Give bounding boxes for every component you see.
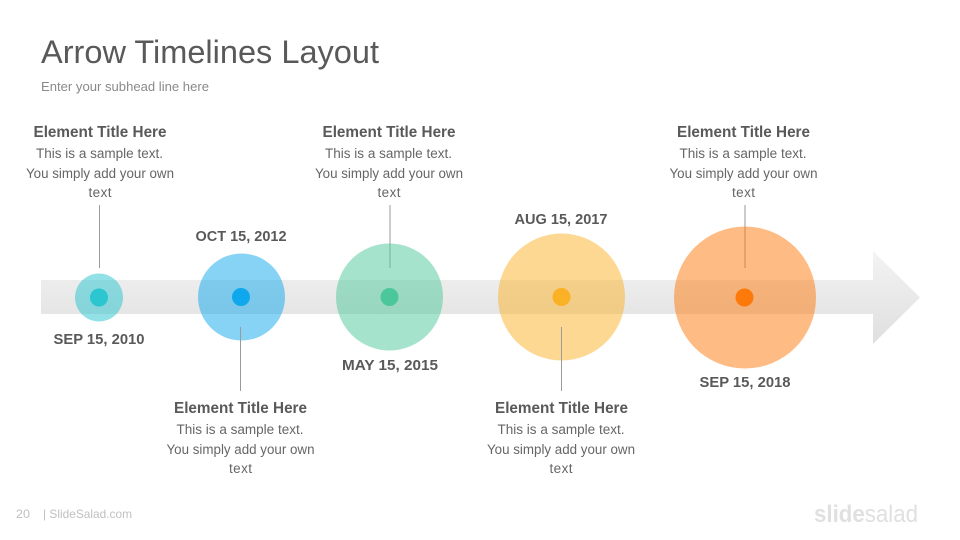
milestone 1: Sep 15, 2010 bbox=[26, 124, 174, 348]
text block: element 4: This is a sample text. bbox=[498, 422, 624, 437]
text block: element 5: Element Title Here bbox=[677, 124, 810, 141]
text block: element 5 bbox=[670, 124, 818, 200]
milestone 3: May 15, 2015 bbox=[315, 124, 463, 374]
footer: page number and site: | SlideSalad.com bbox=[43, 507, 132, 521]
text block: element 4: You simply add your own bbox=[487, 442, 635, 457]
date 1: SEP 15, 2010 bbox=[54, 332, 144, 348]
text block: element 2: You simply add your own bbox=[166, 442, 314, 457]
text block: element 3 bbox=[315, 124, 463, 200]
circle 1 bbox=[75, 274, 123, 322]
text block: element 4: text bbox=[550, 461, 573, 476]
text block: element 1 bbox=[26, 124, 174, 200]
text block: element 1: text bbox=[88, 185, 112, 200]
milestone 4: Aug 15, 2017 bbox=[487, 212, 635, 476]
subhead: Enter your subhead line here bbox=[41, 79, 209, 94]
title: Arrow Timelines Layout bbox=[41, 34, 379, 70]
text block: element 2: Element Title Here bbox=[174, 400, 307, 417]
text block: element 3: This is a sample text. bbox=[325, 146, 452, 161]
text block: element 3: You simply add your own bbox=[315, 166, 463, 181]
text block: element 1: Element Title Here bbox=[34, 124, 167, 141]
text block: element 4: Element Title Here bbox=[495, 400, 628, 417]
milestone 5: Sep 15, 2018 bbox=[670, 124, 818, 391]
date 2: OCT 15, 2012 bbox=[196, 229, 286, 245]
circle 4 bbox=[498, 234, 625, 360]
date 3: MAY 15, 2015 bbox=[342, 358, 438, 374]
date 5: SEP 15, 2018 bbox=[700, 375, 790, 391]
text block: element 1: You simply add your own bbox=[26, 166, 174, 181]
text block: element 4 bbox=[487, 400, 635, 476]
circle 5 bbox=[674, 226, 816, 368]
text block: element 5: This is a sample text. bbox=[680, 146, 806, 161]
milestone 2: Oct 15, 2012 bbox=[166, 229, 314, 476]
text block: element 5: You simply add your own bbox=[670, 166, 818, 181]
arrow: timeline bbox=[41, 251, 920, 344]
text block: element 3: Element Title Here bbox=[322, 124, 456, 141]
date 4: AUG 15, 2017 bbox=[514, 212, 608, 228]
text block: element 3: text bbox=[378, 185, 401, 200]
footer: page number and site: 20 bbox=[16, 507, 30, 521]
text block: element 2: text bbox=[229, 461, 252, 476]
text block: element 2: This is a sample text. bbox=[176, 422, 304, 437]
circle 2 bbox=[198, 254, 285, 340]
text block: element 1: This is a sample text. bbox=[36, 146, 163, 161]
circle 3 bbox=[336, 244, 443, 350]
logo: slidesalad: slidesalad bbox=[814, 501, 918, 528]
text block: element 5: text bbox=[732, 185, 755, 200]
text block: element 2 bbox=[166, 400, 314, 476]
